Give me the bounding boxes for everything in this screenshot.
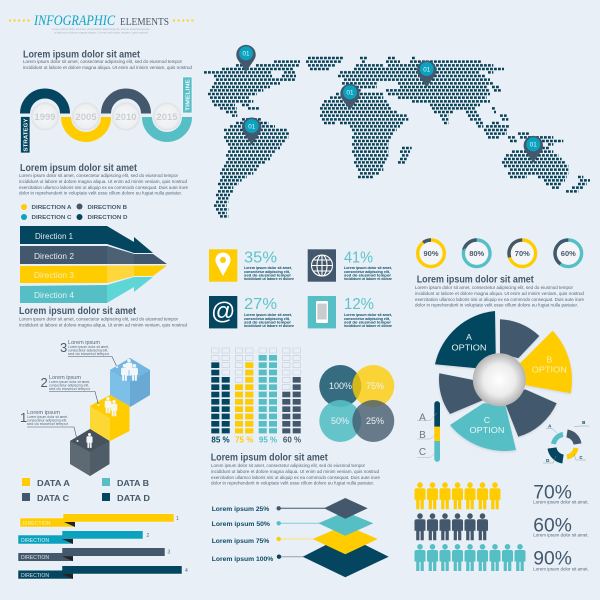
callout 2: 2 <box>40 375 48 390</box>
stat: 41%: incididunt ut labore et dolore <box>344 276 393 281</box>
bar 3: DIRECTION <box>21 555 49 561</box>
stat: 12%: incididunt ut labore et dolore <box>344 323 393 328</box>
bar 1: DIRECTION <box>22 521 51 527</box>
legend: data <box>22 478 150 503</box>
venn circles: 75% <box>366 381 384 391</box>
map pin 5: 01 <box>530 142 537 149</box>
segment labels: OPTION <box>470 425 504 435</box>
callout 3: consectetur adipiscing elit, <box>68 348 108 352</box>
segment labels: B <box>546 354 552 364</box>
callout 2: Lorem ipsum <box>49 375 81 381</box>
heading: cubes text: Lorem ipsum dolor sit amet <box>19 305 136 317</box>
callout 1 <box>20 410 78 442</box>
layer: 100% <box>303 535 389 577</box>
heading: layers text: incididunt ut labore et dolore magna aliqua. Ut enim ad minim veniam, quis nostrud <box>211 469 379 475</box>
leader dots <box>276 506 281 559</box>
cube 3: blue <box>110 358 150 407</box>
map pin 4 <box>417 61 436 87</box>
donut: 90%: 90% <box>423 249 439 258</box>
donut: 80%: 80% <box>469 249 485 258</box>
heading: layers text: dolor in reprehenderit in voluptate velit esse cillum dolore eu fugiat nulla pariatur. <box>211 480 374 486</box>
callout 1: Lorem ipsum dolor sit amet, <box>27 415 68 419</box>
venn circles: 100% <box>329 381 352 391</box>
sphere <box>473 353 526 406</box>
stat: 27%: @ <box>211 298 235 325</box>
heading: pie text: Lorem ipsum dolor sit amet <box>417 273 534 285</box>
arrow: direction 4: Direction 4 <box>34 291 75 300</box>
column labels: 95 % <box>259 436 277 444</box>
title: INFOGRAPHIC <box>33 13 116 29</box>
arrow: direction 4 <box>20 277 153 303</box>
title: Lorem ipsum dolor sit amet, consectetur adipiscing elit, sed do eiusmod tempor <box>52 27 150 31</box>
people row: 70% <box>414 482 589 509</box>
heading: timeline section <box>23 48 192 71</box>
heading: layers text: Lorem ipsum dolor sit amet <box>211 452 328 464</box>
heading: pie text: incididunt ut labore et dolore magna aliqua. Ut enim ad minim veniam, quis nostrud <box>415 291 584 297</box>
dotted world map <box>204 58 590 216</box>
legend: data: DATA B <box>117 479 149 488</box>
segment A <box>435 311 496 368</box>
donut: 80% <box>460 237 493 270</box>
heading: timeline section: Lorem ipsum dolor sit amet <box>23 48 140 60</box>
bar 3: 3 <box>168 550 170 556</box>
segment labels <box>452 332 567 435</box>
segment labels: OPTION <box>532 364 567 374</box>
stat: 12%: 12% <box>344 296 374 313</box>
callout 3: 3 <box>60 340 67 355</box>
layer labels: Lorem ipsum 50% <box>212 521 270 528</box>
heading: cubes text: Lorem ipsum dolor sit amet, consectetur adipiscing elit, sed do eiusmod tempor <box>19 316 178 322</box>
stat: 35%: incididunt ut labore et dolore <box>244 276 295 281</box>
map pin 1 <box>236 45 256 72</box>
heading: pie text: dolor in reprehenderit in voluptate velit esse cillum dolore eu fugiat nulla pariatur. <box>415 302 578 308</box>
segment labels: A <box>466 332 472 342</box>
heading: directions text: exercitation ullamco laboris nisi ut aliquip ex ea commodo consequat. Duis aute irure <box>19 185 188 191</box>
vertical scale A B C: B <box>419 430 426 441</box>
heading: layers text <box>211 452 380 486</box>
stat: 12%: Lorem ipsum dolor sit amet, <box>344 312 392 317</box>
legend: data: DATA A <box>37 479 70 488</box>
segment B <box>520 331 572 393</box>
donut: 90% <box>412 235 450 272</box>
bar 3 <box>18 548 170 561</box>
map pin 4: 01 <box>423 66 431 73</box>
vertical scale A B C: A <box>419 412 426 424</box>
arrow: direction 3 <box>20 266 167 283</box>
timeline chart: STRATEGY <box>24 118 30 152</box>
bar 2 <box>18 531 150 544</box>
arrow: direction 2 <box>20 246 167 264</box>
timeline chart: 1999 <box>34 112 56 123</box>
layer labels: Lorem ipsum 75% <box>212 538 269 545</box>
column 85% <box>215 362 226 433</box>
timeline chart: 2010 <box>115 112 137 123</box>
callout 1: 1 <box>20 410 27 425</box>
donut: 60% <box>550 235 587 272</box>
legend: data: DATA D <box>117 494 150 503</box>
segment slate right <box>505 389 557 437</box>
legend: directions: DIRECTION D <box>88 215 128 221</box>
callout 2 <box>40 375 100 406</box>
layer: 75% <box>313 525 378 554</box>
heading: layers text: Lorem ipsum dolor sit amet, consectetur adipiscing elit, sed do eiusmod tempor <box>211 463 365 469</box>
people row: 60% <box>414 513 589 540</box>
callout 3: Lorem ipsum <box>68 340 100 346</box>
stat: 41%: 41% <box>344 250 373 266</box>
heading: pie text: Lorem ipsum dolor sit amet, consectetur adipiscing elit, sed do eiusmod tempor <box>415 285 573 291</box>
venn circles: 50% <box>331 416 349 426</box>
title: ELEMENTS <box>120 17 169 28</box>
empty cells <box>215 348 297 433</box>
stat: 27%: 27% <box>244 296 277 313</box>
title: ut labore et dolore magna aliqua. Ut enim ad minim veniam, quis nostrud <box>54 30 148 34</box>
segment labels: C <box>484 415 490 425</box>
bar 1: 1 <box>176 516 179 522</box>
heading: directions text: Lorem ipsum dolor sit amet, consectetur adipiscing elit, sed do eiusmod tempor <box>19 173 178 179</box>
arrow: direction 2: Direction 2 <box>34 252 75 261</box>
callout 1: Lorem ipsum <box>27 410 60 416</box>
legend: directions: DIRECTION A <box>32 205 72 211</box>
small donut with labels: A <box>548 424 552 428</box>
callout 1: sed do eiusmod tempor <box>27 422 69 426</box>
callout 1: consectetur adipiscing elit, <box>27 418 67 422</box>
small donut with labels: B <box>582 420 586 425</box>
heading: timeline section: incididunt ut labore et dolore magna aliqua. Ut enim ad minim veniam, quis nostrud <box>23 65 192 71</box>
timeline chart <box>20 77 192 153</box>
bar 4: DIRECTION <box>21 573 49 579</box>
legend: directions: DIRECTION B <box>88 205 127 211</box>
stat: 27%: consectetur adipiscing elit, <box>244 316 290 321</box>
map pin 5 <box>524 136 543 163</box>
stat: 35%: 35% <box>244 250 277 266</box>
timeline chart: 2005 <box>75 112 97 123</box>
timeline chart: TIMELINE <box>186 79 192 111</box>
donut: 70%: 70% <box>515 249 530 258</box>
map pin 3: 01 <box>346 90 354 97</box>
stat: 35%: sed do eiusmod tempor <box>244 272 291 278</box>
heading: cubes text: incididunt ut labore et dolore magna aliqua. Ut enim ad minim veniam, quis nostrud <box>19 322 187 328</box>
heading: layers text: exercitation ullamco laboris nisi ut aliquip ex ea commodo consequat. Duis aute irure <box>211 475 380 481</box>
stat: 27%: incididunt ut labore et dolore <box>244 323 295 328</box>
bar 4: 4 <box>185 568 188 574</box>
cube stack chart <box>20 340 150 476</box>
arrow: direction 1 <box>20 226 153 253</box>
column 75% <box>239 362 249 433</box>
stat: 41%: sed do eiusmod tempor <box>344 272 391 278</box>
segment labels: OPTION <box>452 342 486 352</box>
people row: 90% <box>414 544 589 572</box>
donut: 70% <box>506 237 539 270</box>
stat: 12%: consectetur adipiscing elit, <box>344 316 390 321</box>
callout 3: Lorem ipsum dolor sit amet, <box>68 345 109 349</box>
legend: directions <box>21 204 128 221</box>
bar chart: ribbon bars <box>18 514 188 579</box>
column 60% <box>286 377 297 433</box>
stat: 35%: Lorem ipsum dolor sit amet, <box>244 265 292 270</box>
block column chart <box>211 348 301 444</box>
cube 2: yellow <box>90 395 130 441</box>
people row: 90%: Lorem ipsum dolor sit amet. <box>533 566 589 572</box>
callout 3 <box>60 340 118 368</box>
stat: 41%: consectetur adipiscing elit, <box>344 269 390 274</box>
layer labels <box>212 506 273 563</box>
vertical scale A B C <box>417 401 440 462</box>
map pin 2 <box>242 118 261 145</box>
map pin 2: 01 <box>248 123 256 130</box>
venn circles: 25% <box>366 416 384 426</box>
heading: directions text: dolor in reprehenderit in voluptate velit esse cillum dolore eu fugiat nulla pariatur. <box>19 190 182 196</box>
stat: 12% <box>308 296 393 328</box>
bar 4 <box>18 566 188 579</box>
column labels <box>211 436 301 444</box>
people row: 60%: 60% <box>533 516 572 537</box>
heading: cubes text <box>19 305 187 328</box>
heading: directions text <box>19 162 188 196</box>
layer: 50% <box>318 512 373 536</box>
layer: 25% <box>324 498 368 519</box>
arrow: direction 3: Direction 3 <box>34 271 75 280</box>
segment C <box>450 403 516 451</box>
column labels: 75 % <box>235 436 253 444</box>
map pin 3 <box>340 84 360 110</box>
exploded pie chart <box>435 311 572 451</box>
callout 2: consectetur adipiscing elit, <box>49 384 89 388</box>
venn circles <box>319 365 394 442</box>
people row: 60%: Lorem ipsum dolor sit amet. <box>533 532 589 538</box>
column 95% <box>263 355 273 433</box>
heading: directions text: Lorem ipsum dolor sit amet <box>20 162 137 174</box>
stat: 27%: sed do eiusmod tempor <box>244 320 291 324</box>
map pin 1: 01 <box>242 51 250 58</box>
arrow diagram: directions 1-4 <box>20 226 167 303</box>
donut: 60%: 60% <box>561 249 576 258</box>
callout 2: Lorem ipsum dolor sit amet, <box>49 380 90 384</box>
heading: directions text: incididunt ut labore et dolore magna aliqua. Ut enim ad minim veniam, quis nostrud <box>19 179 187 185</box>
heading: pie text <box>415 273 584 308</box>
stat: 12%: sed do eiusmod tempor <box>344 320 391 324</box>
stat: 35% <box>209 249 295 282</box>
heading: timeline section: Lorem ipsum dolor sit amet, consectetur adipiscing elit, sed do eiusmod tempor <box>23 59 182 65</box>
segment slate top <box>500 319 539 358</box>
people row: 70%: 70% <box>533 482 572 504</box>
cube 1: gray <box>70 429 110 476</box>
stat: 27%: Lorem ipsum dolor sit amet, <box>244 312 292 317</box>
stat: 27% <box>209 296 295 328</box>
column labels: 85 % <box>211 436 230 444</box>
layer labels: Lorem ipsum 25% <box>212 506 269 513</box>
bar 2: DIRECTION <box>21 538 49 544</box>
small donut with labels: D <box>546 458 550 463</box>
segment slate left <box>439 373 483 414</box>
arrow: direction 1: Direction 1 <box>35 232 74 241</box>
people row: 90%: 90% <box>533 548 572 570</box>
leader lines <box>279 508 326 557</box>
timeline chart: 2015 <box>156 112 178 123</box>
people row: 70%: Lorem ipsum dolor sit amet. <box>533 500 589 506</box>
callout 3: sed do eiusmod tempor <box>68 352 110 356</box>
layer labels: Lorem ipsum 100% <box>212 556 273 563</box>
bar 2: 2 <box>146 533 150 539</box>
bar 1 <box>20 514 179 527</box>
vertical scale A B C: C <box>419 447 426 458</box>
stat: 35%: consectetur adipiscing elit, <box>244 269 290 274</box>
small donut with labels: C <box>579 455 583 460</box>
legend: directions: DIRECTION C <box>32 215 72 221</box>
heading: pie text: exercitation ullamco laboris nisi ut aliquip ex ea commodo consequat. Duis aute irure <box>415 297 584 303</box>
stat: 41%: Lorem ipsum dolor sit amet, <box>344 265 392 270</box>
small donut with labels <box>543 420 589 463</box>
layered diamonds chart <box>212 498 389 577</box>
stat: 41% <box>308 249 393 282</box>
title <box>9 13 194 34</box>
legend: data: DATA C <box>37 494 69 503</box>
callout 2: sed do eiusmod tempor <box>49 387 91 391</box>
column labels: 60 % <box>283 436 301 444</box>
